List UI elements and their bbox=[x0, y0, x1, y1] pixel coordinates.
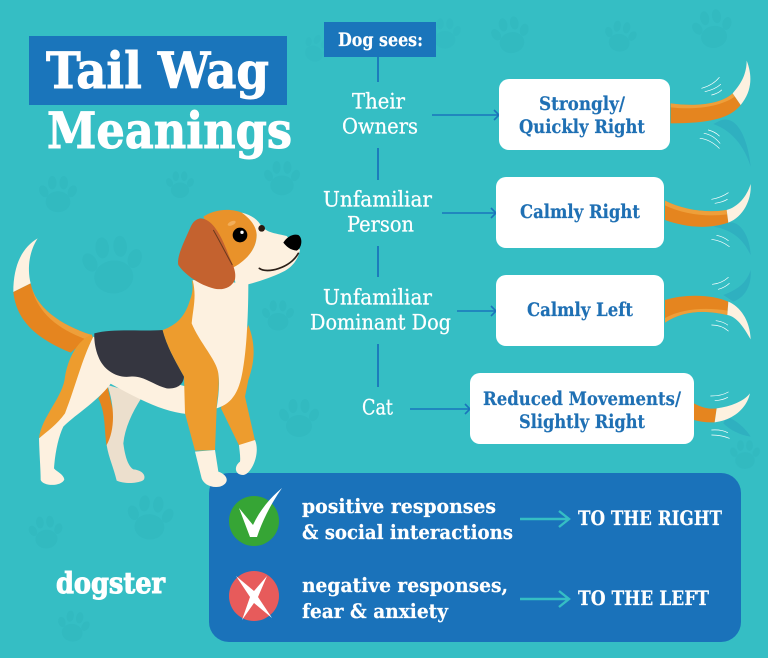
row: unfamiliar dominant dog bbox=[310, 275, 664, 346]
arrow: to the left bbox=[520, 591, 569, 607]
title: Meanings bbox=[47, 101, 292, 160]
row: their owners: Quickly Right bbox=[519, 116, 645, 138]
dogster logo: dogster bbox=[56, 566, 166, 600]
icon: cross mark bbox=[229, 571, 279, 621]
row: unfamiliar dominant dog: Unfamiliar bbox=[323, 286, 433, 310]
row: unfamiliar person bbox=[323, 177, 664, 248]
negative responses text: negative responses, bbox=[302, 573, 508, 597]
row: cat: Reduced Movements/ bbox=[483, 388, 681, 410]
positive responses text bbox=[302, 494, 513, 544]
to the right label: TO THE RIGHT bbox=[578, 506, 722, 530]
row: unfamiliar person: Calmly Right bbox=[520, 201, 640, 223]
legend panel bbox=[209, 473, 741, 642]
arrow: to the right bbox=[520, 511, 569, 527]
title bbox=[29, 36, 292, 160]
dog sees header: Dog sees: bbox=[338, 30, 423, 51]
tail: calmly right bbox=[665, 184, 751, 255]
positive responses text: positive responses bbox=[302, 494, 496, 518]
tail: slightly right bbox=[694, 392, 751, 438]
row: unfamiliar dominant dog: Dominant Dog bbox=[310, 310, 451, 334]
row: cat: Cat bbox=[362, 396, 393, 420]
dog sees header bbox=[324, 22, 436, 57]
negative responses text: fear & anxiety bbox=[302, 599, 449, 623]
icon: check mark bbox=[229, 488, 282, 546]
connector lines bbox=[377, 57, 379, 387]
row: their owners: Their bbox=[352, 90, 406, 114]
tail: calmly left bbox=[665, 270, 751, 339]
to the left label: TO THE LEFT bbox=[578, 586, 709, 610]
row: unfamiliar person: Person bbox=[347, 212, 414, 236]
row: their owners: Owners bbox=[342, 114, 418, 138]
row: cat bbox=[362, 373, 694, 444]
dog illustration bbox=[13, 210, 301, 487]
row: cat: Slightly Right bbox=[519, 411, 645, 433]
negative responses text bbox=[302, 573, 508, 623]
row: their owners: Strongly/ bbox=[539, 93, 625, 115]
tail: strongly right bbox=[671, 61, 751, 167]
row: unfamiliar dominant dog: Calmly Left bbox=[527, 299, 633, 321]
row: their owners bbox=[342, 79, 670, 150]
row: unfamiliar person: Unfamiliar bbox=[323, 188, 433, 212]
title: Tail Wag bbox=[46, 41, 269, 100]
positive responses text: & social interactions bbox=[302, 520, 513, 544]
